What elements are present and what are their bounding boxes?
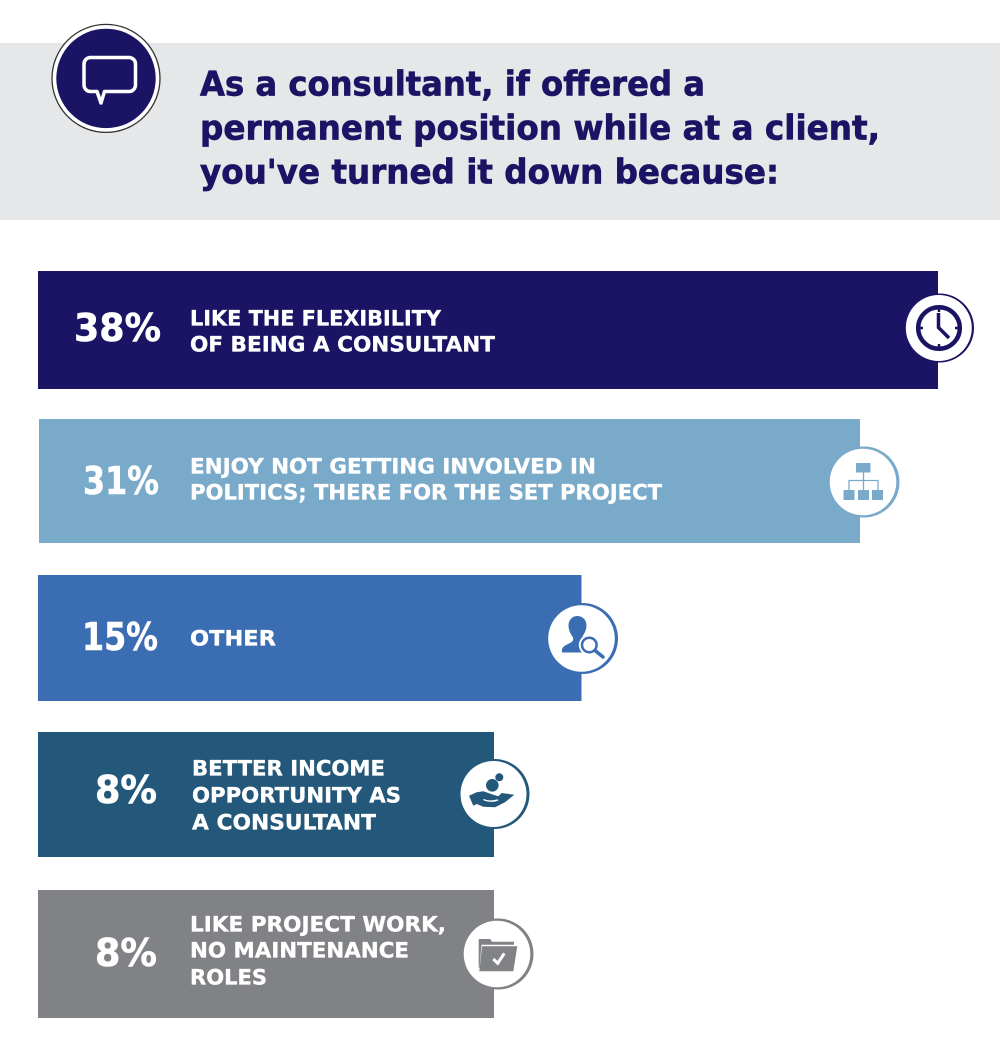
- label: politics: ENJOY NOT GETTING INVOLVED IN: [190, 454, 596, 480]
- bar: 38%: [38, 271, 938, 389]
- panel: 8% income: [38, 732, 530, 857]
- label: project work: [190, 912, 446, 990]
- bar: 15%: [38, 575, 582, 701]
- label: income: BETTER INCOME: [192, 756, 385, 782]
- value: 15%: 15%: [82, 615, 158, 659]
- title: permanent position while at a client,: [200, 108, 880, 148]
- value: 38%: 38%: [74, 306, 161, 350]
- panel: 31% politics: [39, 419, 900, 543]
- label: flexibility: LIKE THE FLEXIBILITY: [190, 306, 441, 332]
- label: politics: [190, 454, 662, 506]
- icon: folder with check: [462, 918, 534, 990]
- title: you've turned it down because:: [200, 152, 779, 192]
- icon: org chart: [828, 446, 900, 518]
- bar: 8% project: [38, 890, 494, 1018]
- label: flexibility: [190, 306, 495, 358]
- value: 8% project: 8%: [95, 931, 157, 975]
- label: project work: ROLES: [190, 966, 267, 990]
- label: flexibility: OF BEING A CONSULTANT: [190, 332, 495, 358]
- bar: 8% income: [38, 732, 494, 857]
- value: 8% income: 8%: [95, 768, 157, 812]
- title: [200, 64, 880, 192]
- bar: 31%: [39, 419, 860, 543]
- icon: person with magnifier: [547, 603, 618, 674]
- label: income: [192, 756, 401, 836]
- panel: 15% other: [38, 575, 618, 701]
- icon: speech bubble: [52, 24, 160, 132]
- label: income: OPPORTUNITY AS: [192, 784, 401, 808]
- value: 31%: 31%: [83, 459, 159, 503]
- label: other: OTHER: [190, 626, 276, 652]
- label: income: A CONSULTANT: [192, 810, 376, 836]
- icon: clock: [905, 294, 974, 362]
- label: politics: POLITICS; THERE FOR THE SET PROJECT: [190, 480, 662, 506]
- label: project work: NO MAINTENANCE: [190, 938, 409, 964]
- label: project work: LIKE PROJECT WORK,: [190, 912, 446, 938]
- title: As a consultant, if offered a: [200, 64, 705, 104]
- panel: 8% project work: [38, 890, 534, 1018]
- header band: [0, 43, 1000, 220]
- panel: 38% flexibility: [38, 271, 974, 389]
- icon: hand with coins: [460, 759, 530, 829]
